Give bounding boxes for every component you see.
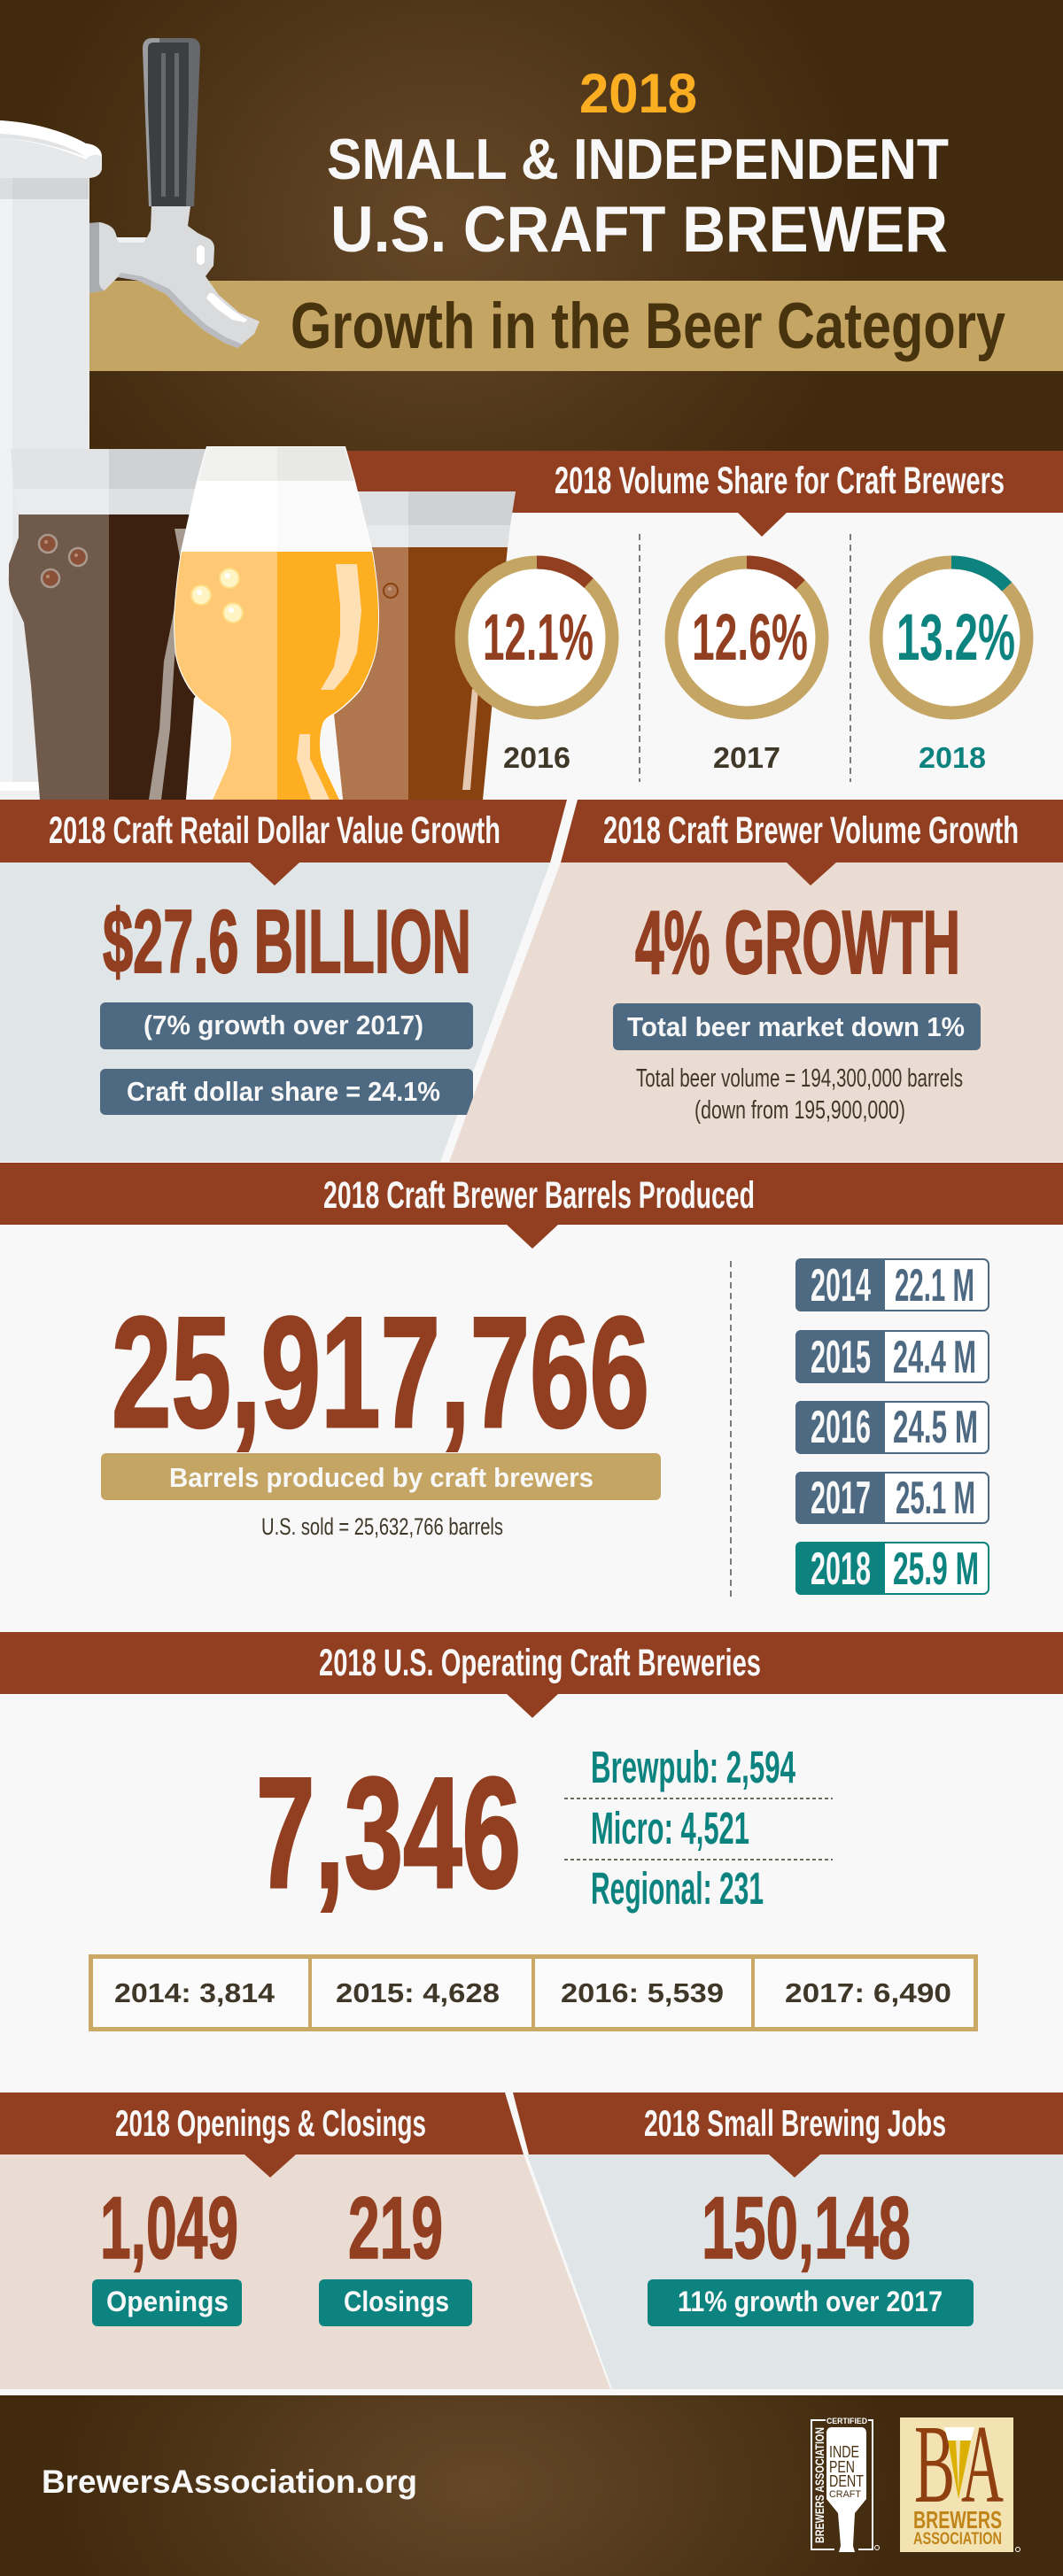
donut chart: 2016 share [462, 562, 612, 774]
donut chart: 2017 share: 2017 [713, 741, 780, 774]
year box: 2014: 2014 [811, 1260, 871, 1311]
brewery type breakdown: Brewpub: 2,594 [591, 1742, 795, 1792]
year box: 2017: 2017 [811, 1473, 871, 1524]
heading band: barrels produced: 2018 Craft Brewer Barrels Produced [323, 1174, 755, 1217]
panel: craft retail dollar value growth: 2018 Craft Retail Dollar Value Growth [49, 809, 500, 852]
brewery type breakdown [564, 1742, 833, 1914]
icon: beer tower [0, 120, 102, 800]
panel: craft brewer volume growth: (down from 195,900,000) [694, 1096, 905, 1125]
year box: 2017: 25.1 M [896, 1473, 975, 1524]
table: breweries by year [90, 1956, 976, 2030]
illustration: amber beer glass [328, 491, 516, 800]
heading band: barrels produced [0, 1163, 1063, 1249]
year box: 2015: 24.4 M [893, 1332, 976, 1383]
logo: Brewers Association: BREWERS [913, 2506, 1002, 2533]
panel: volume share background [354, 513, 1063, 801]
title banner: tan strip [89, 281, 1063, 371]
illustration: pale beer glass [174, 446, 379, 800]
panel: openings and closings: 219 [348, 2178, 443, 2277]
brewery type breakdown: Regional: 231 [591, 1863, 764, 1914]
year box: 2014 [795, 1258, 989, 1311]
panel: openings and closings: 2018 Openings & Closings [115, 2102, 426, 2144]
panel: openings and closings [0, 2093, 610, 2389]
logo: Brewers Association: ASSOCIATION [913, 2530, 1002, 2549]
donut chart: 2016 share: 2016 [503, 741, 570, 774]
label: barrels produced by craft brewers [101, 1453, 661, 1500]
header background [0, 0, 1063, 452]
panel: craft retail dollar value growth: Craft dollar share = 24.1% [127, 1076, 440, 1107]
panel: small brewing jobs: 150,148 [702, 2178, 911, 2277]
panel: openings and closings: 1,049 [100, 2178, 238, 2277]
donut chart: 2016 share: 12.1% [483, 600, 594, 674]
panel: craft retail dollar value growth [0, 800, 567, 1162]
year box: 2016 [795, 1401, 989, 1454]
table: breweries by year: 2016: 5,539 [561, 1977, 724, 2008]
note: U.S. sold: U.S. sold = 25,632,766 barrels [261, 1513, 503, 1540]
logo: certified independent craft: CERTIFIED [826, 2417, 867, 2425]
big number: breweries: 7,346 [256, 1744, 521, 1921]
donut chart: 2017 share [671, 562, 822, 774]
heading band: operating craft breweries: 2018 U.S. Operating Craft Breweries [319, 1642, 761, 1684]
footer background [0, 2395, 1063, 2576]
table: breweries by year: 2017: 6,490 [785, 1977, 951, 2008]
donut chart: 2018 share [876, 562, 1027, 774]
logo: certified independent craft: DENT [829, 2472, 864, 2490]
panel: craft retail dollar value growth: $27.6 BILLION [103, 893, 471, 992]
table: breweries by year: 2015: 4,628 [336, 1977, 500, 2008]
logo: certified independent craft: CRAFT [829, 2489, 861, 2500]
label: barrels produced by craft brewers: Barrels produced by craft brewers [169, 1462, 594, 1493]
year box: 2016: 24.5 M [893, 1402, 978, 1453]
logo: Brewers Association [900, 2403, 1020, 2552]
title: year: 2018 [579, 63, 697, 125]
year box: 2016: 2016 [811, 1402, 871, 1453]
title: small and independent: SMALL & INDEPENDENT [327, 127, 949, 191]
logo: Brewers Association: A [961, 2403, 1004, 2526]
icon: tap handle and faucet [89, 38, 260, 348]
year box: 2018: 2018 [811, 1543, 871, 1595]
year box: 2018 [795, 1542, 989, 1595]
heading band: volume share [345, 451, 1063, 537]
year box: 2015 [795, 1330, 989, 1383]
panel: small brewing jobs [513, 2093, 1063, 2389]
heading band: operating craft breweries [0, 1632, 1063, 1718]
panel: craft retail dollar value growth: (7% growth over 2017) [144, 1010, 423, 1040]
year box: 2017 [795, 1472, 989, 1524]
logo: certified independent craft: INDE [829, 2443, 859, 2461]
panel: small brewing jobs: 11% growth over 2017 [678, 2286, 943, 2317]
donut chart: 2017 share: 12.6% [692, 600, 808, 674]
panel: craft brewer volume growth: Total beer market down 1% [627, 1011, 965, 1042]
logo: certified independent craft: PEN [829, 2458, 855, 2476]
panel: openings and closings: Openings [106, 2286, 229, 2317]
year box: 2018: 25.9 M [893, 1543, 979, 1595]
table: breweries by year: 2014: 3,814 [114, 1977, 275, 2008]
logo: certified independent craft [811, 2417, 879, 2552]
logo: Brewers Association: B [914, 2403, 955, 2526]
logo: certified independent craft: BREWERS ASSOCIATION [812, 2427, 826, 2543]
year box: 2014: 22.1 M [895, 1260, 974, 1311]
panel: craft brewer volume growth [449, 800, 1063, 1162]
panel: openings and closings: Closings [344, 2286, 449, 2317]
title: U.S. craft brewer: U.S. CRAFT BREWER [330, 194, 948, 266]
big number: barrels produced: 25,917,766 [112, 1284, 649, 1460]
illustration: dark beer glass [9, 449, 213, 800]
footer: website: BrewersAssociation.org [42, 2464, 417, 2500]
donut chart: 2018 share: 2018 [919, 741, 986, 774]
brewery type breakdown: Micro: 4,521 [591, 1803, 749, 1853]
year box: 2015: 2015 [811, 1332, 871, 1383]
